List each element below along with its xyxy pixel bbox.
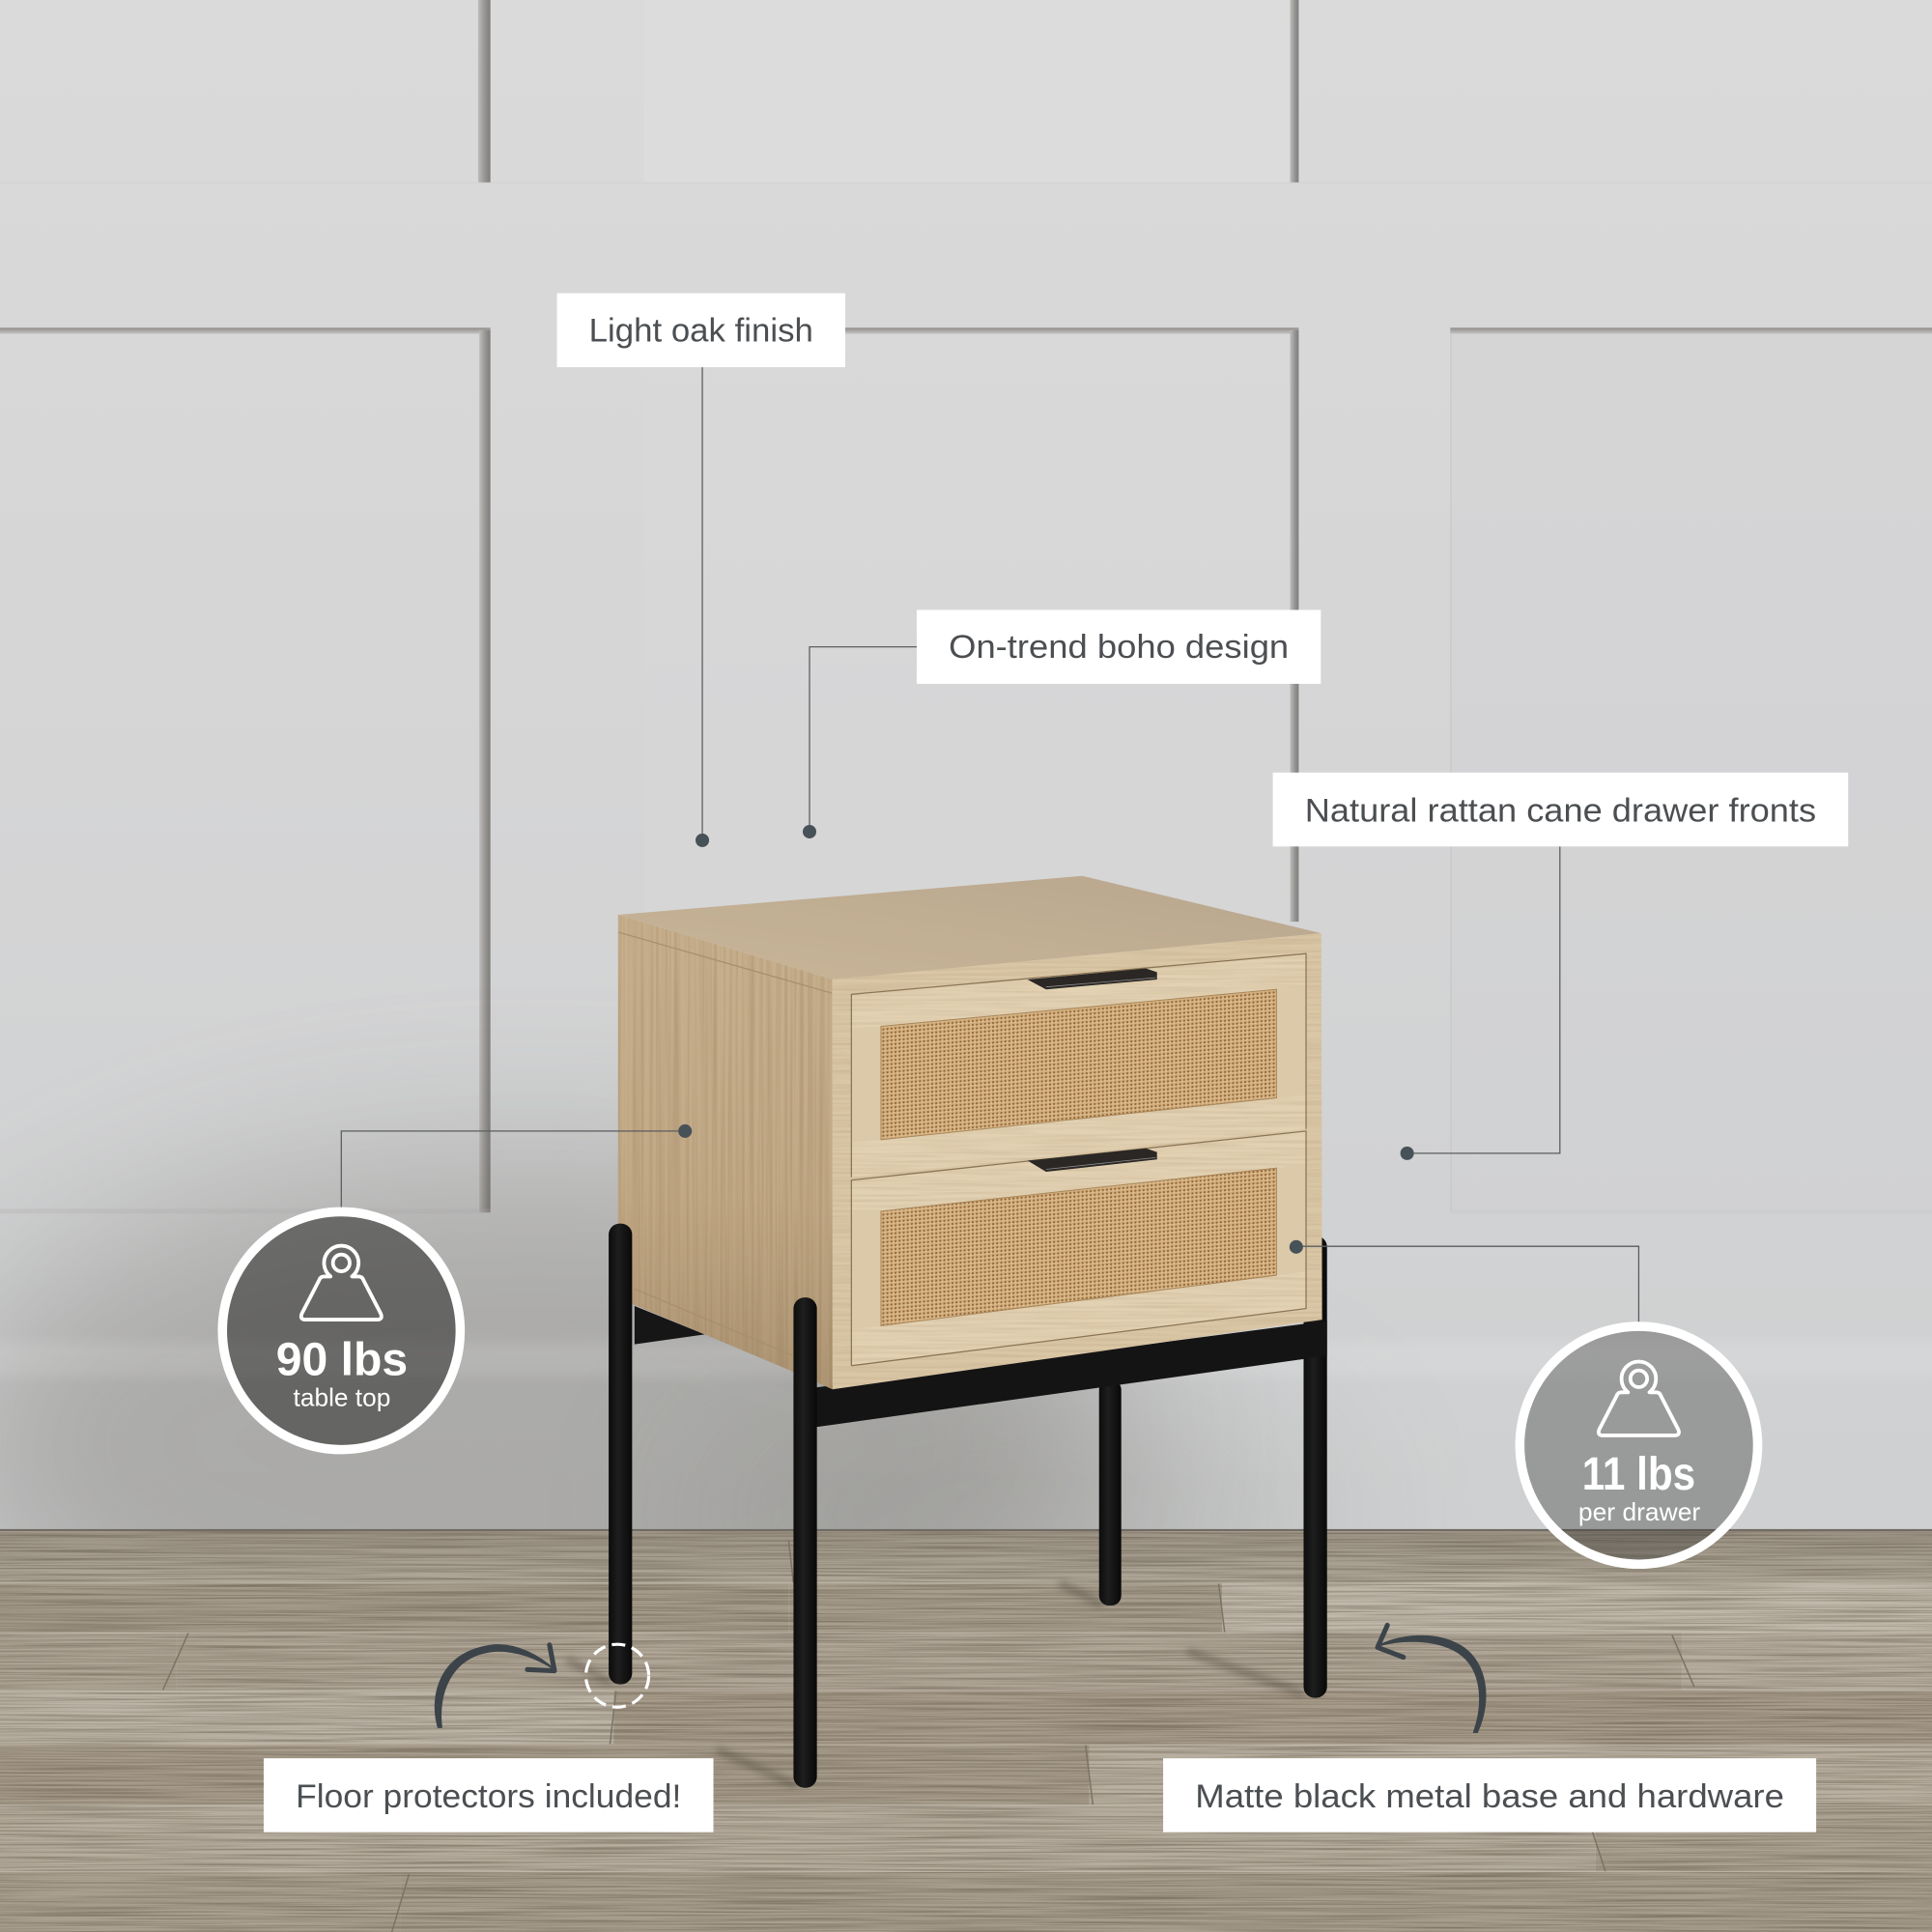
drawer one (851, 953, 1306, 1178)
label: light oak finish (557, 294, 845, 367)
arrow: to floor protector (435, 1645, 554, 1727)
badge: 90 lbs table top: 90 lbs (276, 1333, 408, 1385)
label: natural rattan cane drawer fronts: Natural rattan cane drawer fronts (1305, 793, 1816, 830)
wooden floor (0, 1529, 1932, 1932)
label: on-trend boho design (917, 610, 1321, 684)
label: floor protectors: Floor protectors included! (296, 1778, 681, 1815)
leader: rattan cane (1401, 846, 1560, 1160)
badge: 11 lbs per drawer (1520, 1326, 1758, 1564)
rattan cane panels (881, 989, 1276, 1325)
metal base: back leg, right leg, rail (635, 1236, 1327, 1698)
icon: weight (301, 1246, 382, 1320)
badge: 90 lbs table top (222, 1211, 460, 1450)
leader: table top weight (341, 1124, 692, 1213)
label: natural rattan cane drawer fronts (1273, 773, 1848, 846)
label: floor protectors (264, 1758, 714, 1833)
leader: light oak (696, 367, 709, 847)
leader: boho design (803, 647, 917, 838)
icon: weight (1599, 1361, 1679, 1435)
label: matte black base (1163, 1758, 1816, 1833)
label: light oak finish: Light oak finish (589, 312, 813, 349)
icon: dashed circle around foot (586, 1644, 649, 1707)
cabinet side (618, 915, 833, 1389)
leader: drawer weight (1290, 1240, 1638, 1328)
cabinet front frame (833, 933, 1322, 1389)
badge: 90 lbs table top: table top (294, 1382, 390, 1411)
badge: 11 lbs per drawer: 11 lbs (1582, 1448, 1695, 1500)
badge: 11 lbs per drawer: per drawer (1578, 1497, 1701, 1526)
label: matte black base: Matte black metal base and hardware (1195, 1778, 1784, 1815)
drawer handles (1028, 969, 1157, 1172)
cabinet top (618, 876, 1321, 980)
label: on-trend boho design: On-trend boho design (949, 629, 1289, 666)
wall background (0, 0, 1932, 1529)
arrow: to metal base (1378, 1625, 1486, 1732)
front legs (609, 1224, 817, 1788)
nightstand (609, 876, 1327, 1788)
drawer two (851, 1131, 1306, 1366)
